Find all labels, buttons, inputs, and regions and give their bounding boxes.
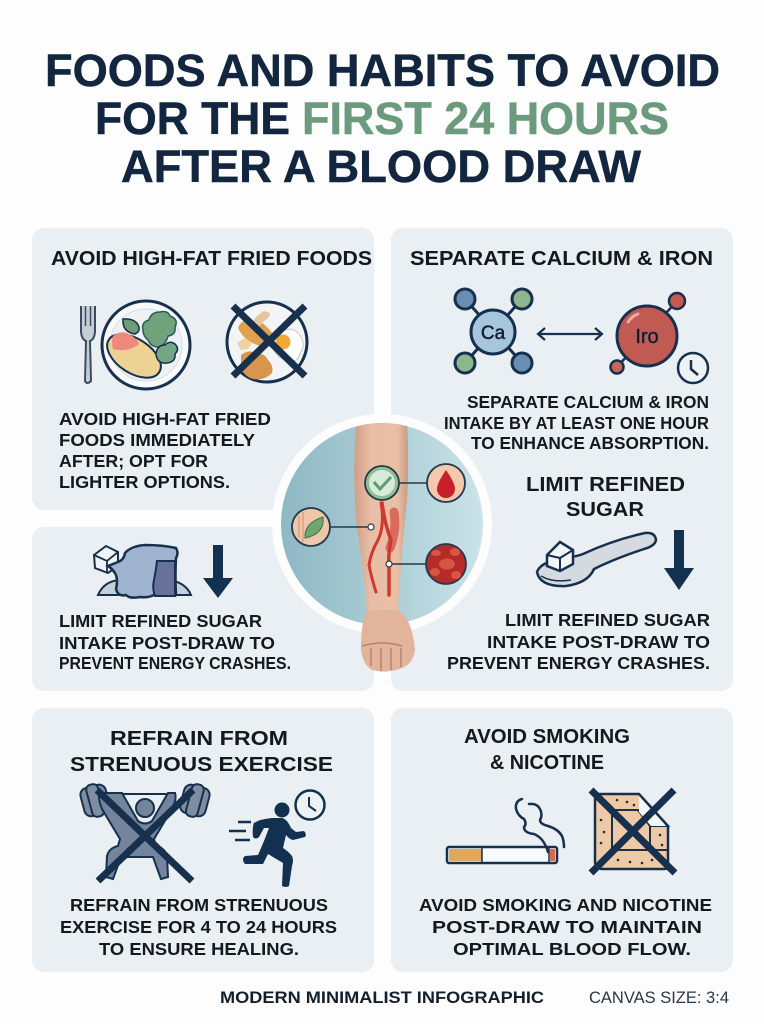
title: FOR THE xyxy=(95,93,290,144)
icon: healthy plate xyxy=(100,301,190,389)
footer: MODERN MINIMALIST INFOGRAPHIC xyxy=(220,989,544,1007)
text: fried foods body: FOODS IMMEDIATELY xyxy=(59,430,255,450)
icon: speed lines xyxy=(229,822,251,840)
fist xyxy=(361,610,415,672)
text: sugar body left: PREVENT ENERGY CRASHES. xyxy=(59,653,291,673)
icon: leaf badge xyxy=(292,508,330,546)
text: smoking body: AVOID SMOKING AND NICOTINE xyxy=(419,895,712,915)
icon: calcium molecule xyxy=(455,289,532,373)
icon: red cells badge xyxy=(426,544,466,584)
heading: exercise: REFRAIN FROM xyxy=(110,728,288,750)
arrow: double-headed xyxy=(538,328,602,340)
text: smoking body: POST-DRAW TO MAINTAIN xyxy=(432,917,702,937)
text: sugar body right: INTAKE POST-DRAW TO xyxy=(487,632,710,652)
text: calcium body: INTAKE BY AT LEAST ONE HOUR xyxy=(444,413,709,433)
text: sugar body left: INTAKE POST-DRAW TO xyxy=(59,633,275,653)
panel: avoid smoking and nicotine xyxy=(391,708,733,972)
text: sugar body right: LIMIT REFINED SUGAR xyxy=(505,610,710,630)
text: calcium body: TO ENHANCE ABSORPTION. xyxy=(471,433,709,453)
heading: limit refined sugar xyxy=(526,474,685,521)
text: sugar body right: PREVENT ENERGY CRASHES. xyxy=(447,653,710,673)
heading: limit refined sugar: LIMIT REFINED xyxy=(526,474,685,496)
text: calcium body xyxy=(444,392,709,453)
heading: exercise xyxy=(70,728,333,776)
icon: check badge xyxy=(365,466,399,500)
title xyxy=(45,45,720,192)
text: fried foods body: AFTER; OPT FOR xyxy=(59,451,208,471)
text: smoking body: OPTIMAL BLOOD FLOW. xyxy=(453,939,691,959)
heading: limit refined sugar: SUGAR xyxy=(566,499,645,521)
icon: nicotine patch crossed out xyxy=(591,790,675,873)
central arm illustration xyxy=(272,414,492,672)
icon: cigarette with smoke xyxy=(447,799,564,863)
veins xyxy=(369,503,395,595)
callout: connector dots xyxy=(368,524,392,567)
text: exercise body: REFRAIN FROM STRENUOUS xyxy=(70,895,328,915)
icon: fork xyxy=(81,306,95,383)
footer: CANVAS SIZE: 3:4 xyxy=(589,989,729,1007)
arrow: down, right panel xyxy=(664,530,694,590)
icon: sugar spoon xyxy=(537,533,656,586)
icon: iron molecule xyxy=(610,293,685,374)
forearm xyxy=(354,420,408,612)
panel: refrain from strenuous exercise xyxy=(32,708,374,972)
arrow: down, left panel xyxy=(203,545,233,598)
heading: fried foods: AVOID HIGH-FAT FRIED FOODS xyxy=(51,248,372,270)
heading: calcium and iron: SEPARATE CALCIUM & IRON xyxy=(410,248,713,270)
text: sugar body left: LIMIT REFINED SUGAR xyxy=(59,611,262,631)
title: FOODS AND HABITS TO AVOID xyxy=(45,45,720,96)
heading: smoking: AVOID SMOKING xyxy=(464,726,630,748)
text: fried foods body: LIGHTER OPTIONS. xyxy=(59,472,230,492)
panel: limit refined sugar left xyxy=(32,527,374,691)
icon: exercise clock xyxy=(296,790,324,820)
text: calcium body: SEPARATE CALCIUM & IRON xyxy=(467,392,709,412)
callout: connector lines xyxy=(330,483,428,564)
icon: blood drop badge xyxy=(427,464,465,502)
text: exercise body xyxy=(60,895,337,959)
icon: runner xyxy=(243,802,306,887)
footer xyxy=(220,989,729,1007)
text: exercise body: EXERCISE FOR 4 TO 24 HOURS xyxy=(60,917,337,937)
text: exercise body: TO ENSURE HEALING. xyxy=(99,939,299,959)
icon: weightlifter crossed out xyxy=(79,783,211,881)
panel: separate calcium and iron, limit sugar xyxy=(391,228,733,691)
heading: exercise: STRENUOUS EXERCISE xyxy=(70,754,333,776)
heading: smoking xyxy=(464,726,630,774)
text: smoking body xyxy=(419,895,712,959)
text: fried foods body: AVOID HIGH-FAT FRIED xyxy=(59,409,271,429)
icon: calcium molecule: Ca xyxy=(481,323,506,344)
title: AFTER A BLOOD DRAW xyxy=(121,141,642,192)
panel: avoid high-fat fried foods xyxy=(32,228,374,510)
icon: iron molecule: Iro xyxy=(635,326,659,348)
text: fried foods body xyxy=(59,409,271,492)
text: sugar body left xyxy=(59,611,291,673)
icon: sugar cube and blob xyxy=(94,545,191,598)
heading: smoking: & NICOTINE xyxy=(490,752,604,774)
icon: clock xyxy=(678,353,708,383)
title: FIRST 24 HOURS xyxy=(302,93,669,144)
text: sugar body right xyxy=(447,610,710,673)
icon: fried plate crossed out xyxy=(227,302,307,382)
